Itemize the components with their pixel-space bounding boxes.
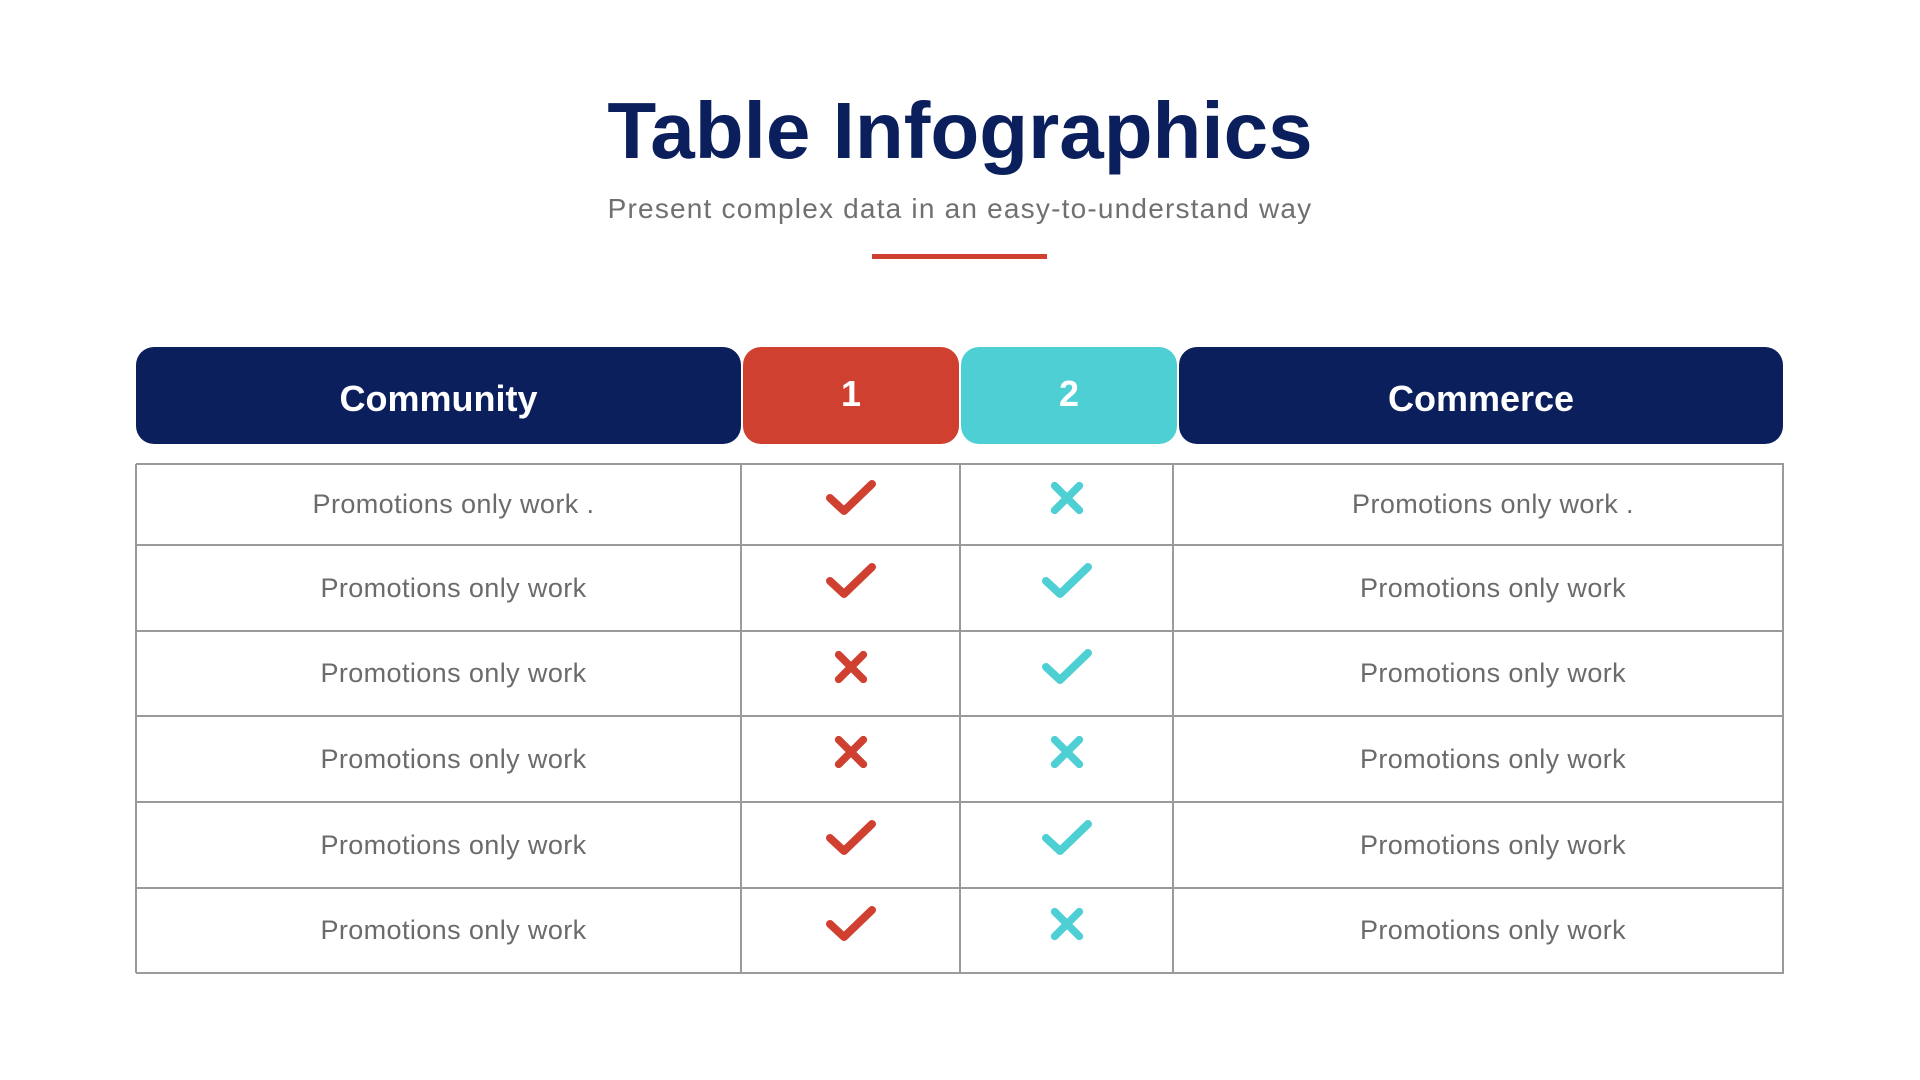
header: Commerce: Commerce: [1388, 378, 1574, 418]
accent line: [872, 254, 1047, 259]
header: 1: 1: [841, 373, 861, 414]
row 5: [320, 820, 1626, 860]
subtitle: Present complex data in an easy-to-understand way: [608, 193, 1312, 224]
table: Promotions only work .: [313, 489, 594, 519]
title: Table Infographics: [607, 86, 1313, 175]
table: Promotions only work: [1360, 915, 1626, 945]
table: Promotions only work: [1360, 830, 1626, 860]
table: Promotions only work: [1360, 744, 1626, 774]
table: Promotions only work: [320, 572, 587, 602]
row 6: [320, 906, 1626, 945]
header: Commerce: [1179, 347, 1783, 444]
table: Promotions only work: [320, 915, 587, 945]
header: Community: Community: [340, 378, 538, 418]
row 3: [320, 649, 1626, 688]
table: Promotions only work: [1360, 658, 1626, 688]
header: 2: 2: [1059, 373, 1079, 414]
table: Promotions only work: [320, 830, 587, 860]
row 2: [320, 563, 1626, 602]
table: Promotions only work .: [1352, 489, 1634, 519]
header: Community: [136, 347, 741, 444]
header: 2: [961, 347, 1177, 444]
row 4: [320, 736, 1626, 774]
header: 1: [743, 347, 959, 444]
table: Promotions only work: [320, 744, 587, 774]
table: Promotions only work: [320, 658, 587, 688]
row 1: [313, 480, 1634, 519]
table: Promotions only work: [1360, 572, 1626, 602]
